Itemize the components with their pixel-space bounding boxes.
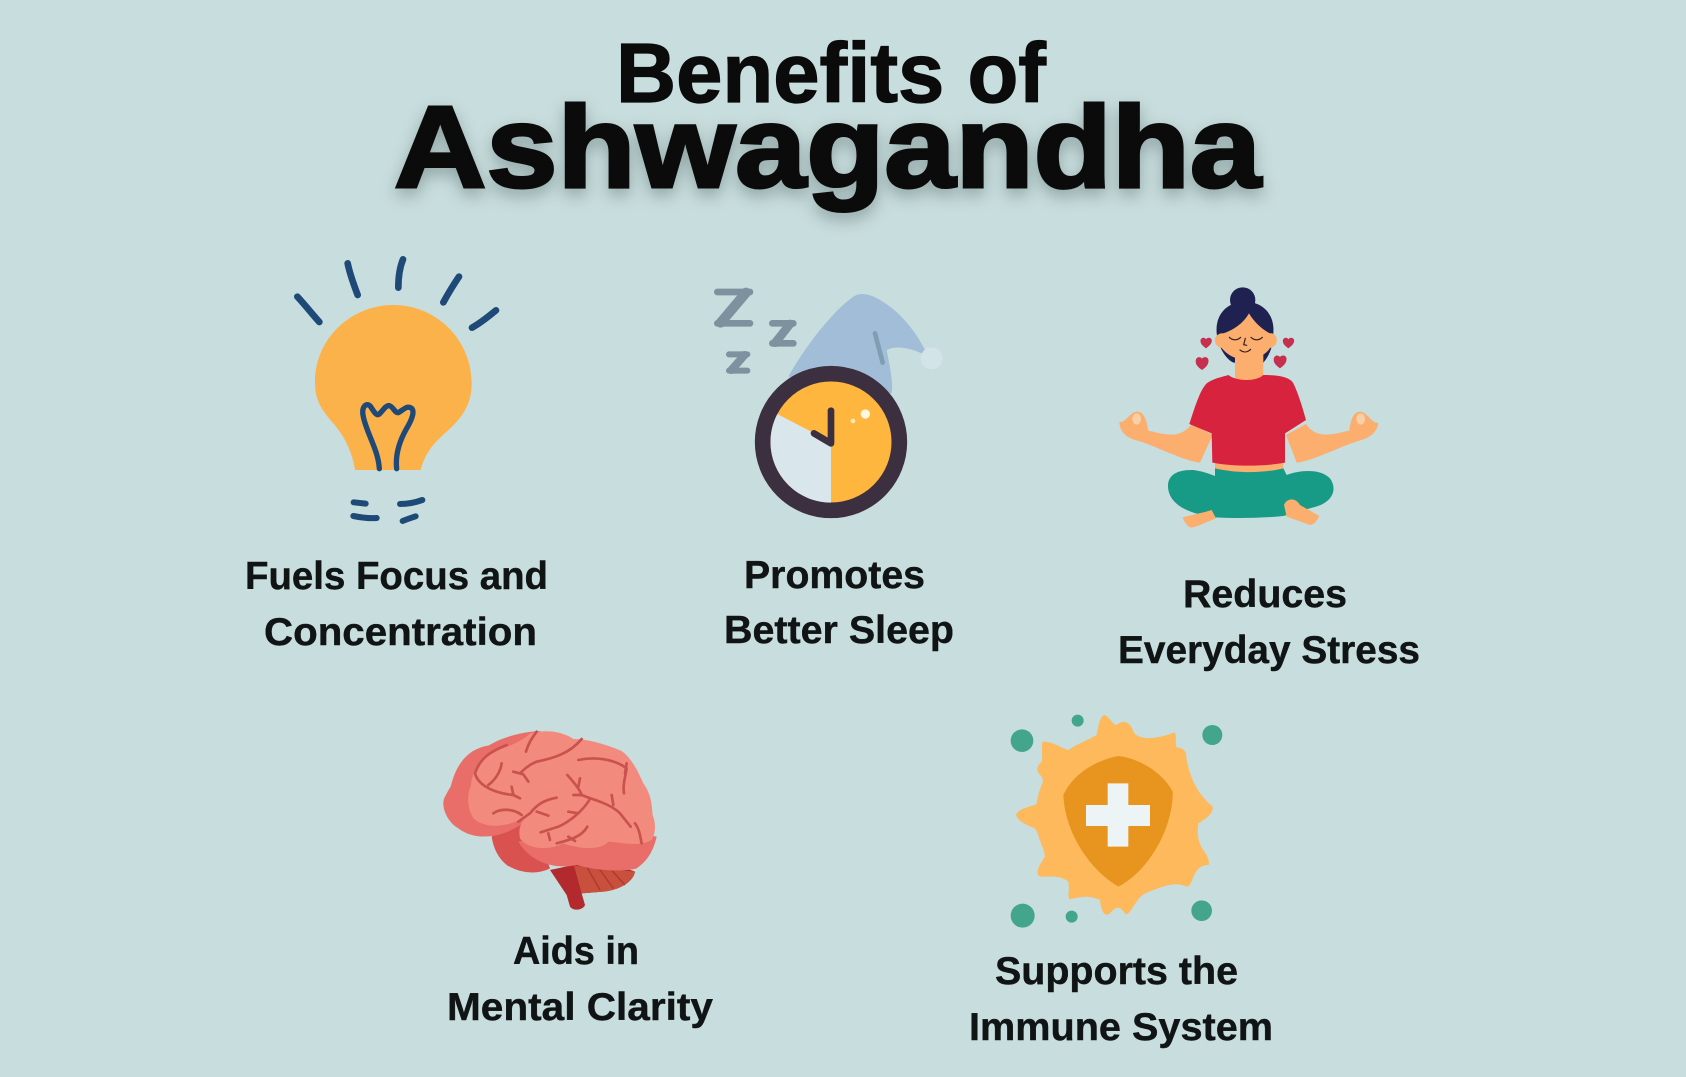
label: Supports the Immune System: Immune System xyxy=(969,1006,1273,1049)
label: Reduces Everyday Stress xyxy=(1118,573,1420,672)
sun burst xyxy=(1016,715,1213,915)
clock face xyxy=(763,374,899,510)
icon: clock with sleeping cap xyxy=(717,292,943,510)
label: Promotes Better Sleep: Better Sleep xyxy=(724,609,954,652)
icon: immune shield xyxy=(1011,715,1222,928)
main lobe xyxy=(468,731,655,848)
cross xyxy=(1086,783,1150,847)
green dots xyxy=(1011,715,1222,928)
label: Fuels Focus and Concentration: Fuels Focus and xyxy=(245,555,548,598)
feet xyxy=(1183,510,1216,528)
title xyxy=(394,26,1263,212)
label: Fuels Focus and Concentration: Concentration xyxy=(264,611,537,654)
hair back xyxy=(1230,287,1255,313)
gyri lines xyxy=(475,732,642,843)
label: Supports the Immune System: Supports the xyxy=(995,950,1238,993)
label: Aids in Mental Clarity: Aids in xyxy=(513,930,639,973)
label: Promotes Better Sleep: Promotes xyxy=(744,554,925,597)
shirt xyxy=(1189,375,1306,466)
icon: meditating woman xyxy=(1119,287,1378,528)
label: Aids in Mental Clarity xyxy=(447,930,713,1029)
neck and arms xyxy=(1119,350,1378,473)
icon: light bulb xyxy=(297,259,496,521)
label: Reduces Everyday Stress: Everyday Stress xyxy=(1118,629,1420,672)
lower rim xyxy=(518,825,657,871)
dark outer lobe xyxy=(443,731,557,837)
title line: Benefits of: Benefits of xyxy=(616,26,1047,120)
shield xyxy=(1063,756,1173,887)
title line: Ashwagandha: Ashwagandha xyxy=(394,82,1263,212)
Z letters xyxy=(717,292,793,371)
face xyxy=(1215,313,1277,359)
label: Supports the Immune System xyxy=(969,950,1273,1049)
label: Reduces Everyday Stress: Reduces xyxy=(1183,573,1347,616)
label: Promotes Better Sleep xyxy=(724,554,954,652)
brain stem and cerebellum xyxy=(550,865,635,910)
label: Fuels Focus and Concentration xyxy=(245,555,548,654)
underside xyxy=(492,822,550,872)
pants xyxy=(1168,468,1334,518)
finger rings xyxy=(1132,413,1141,425)
sleeping cap xyxy=(788,294,925,393)
hearts xyxy=(1196,338,1294,370)
icon: brain xyxy=(443,731,657,910)
label: Aids in Mental Clarity: Mental Clarity xyxy=(447,986,713,1029)
